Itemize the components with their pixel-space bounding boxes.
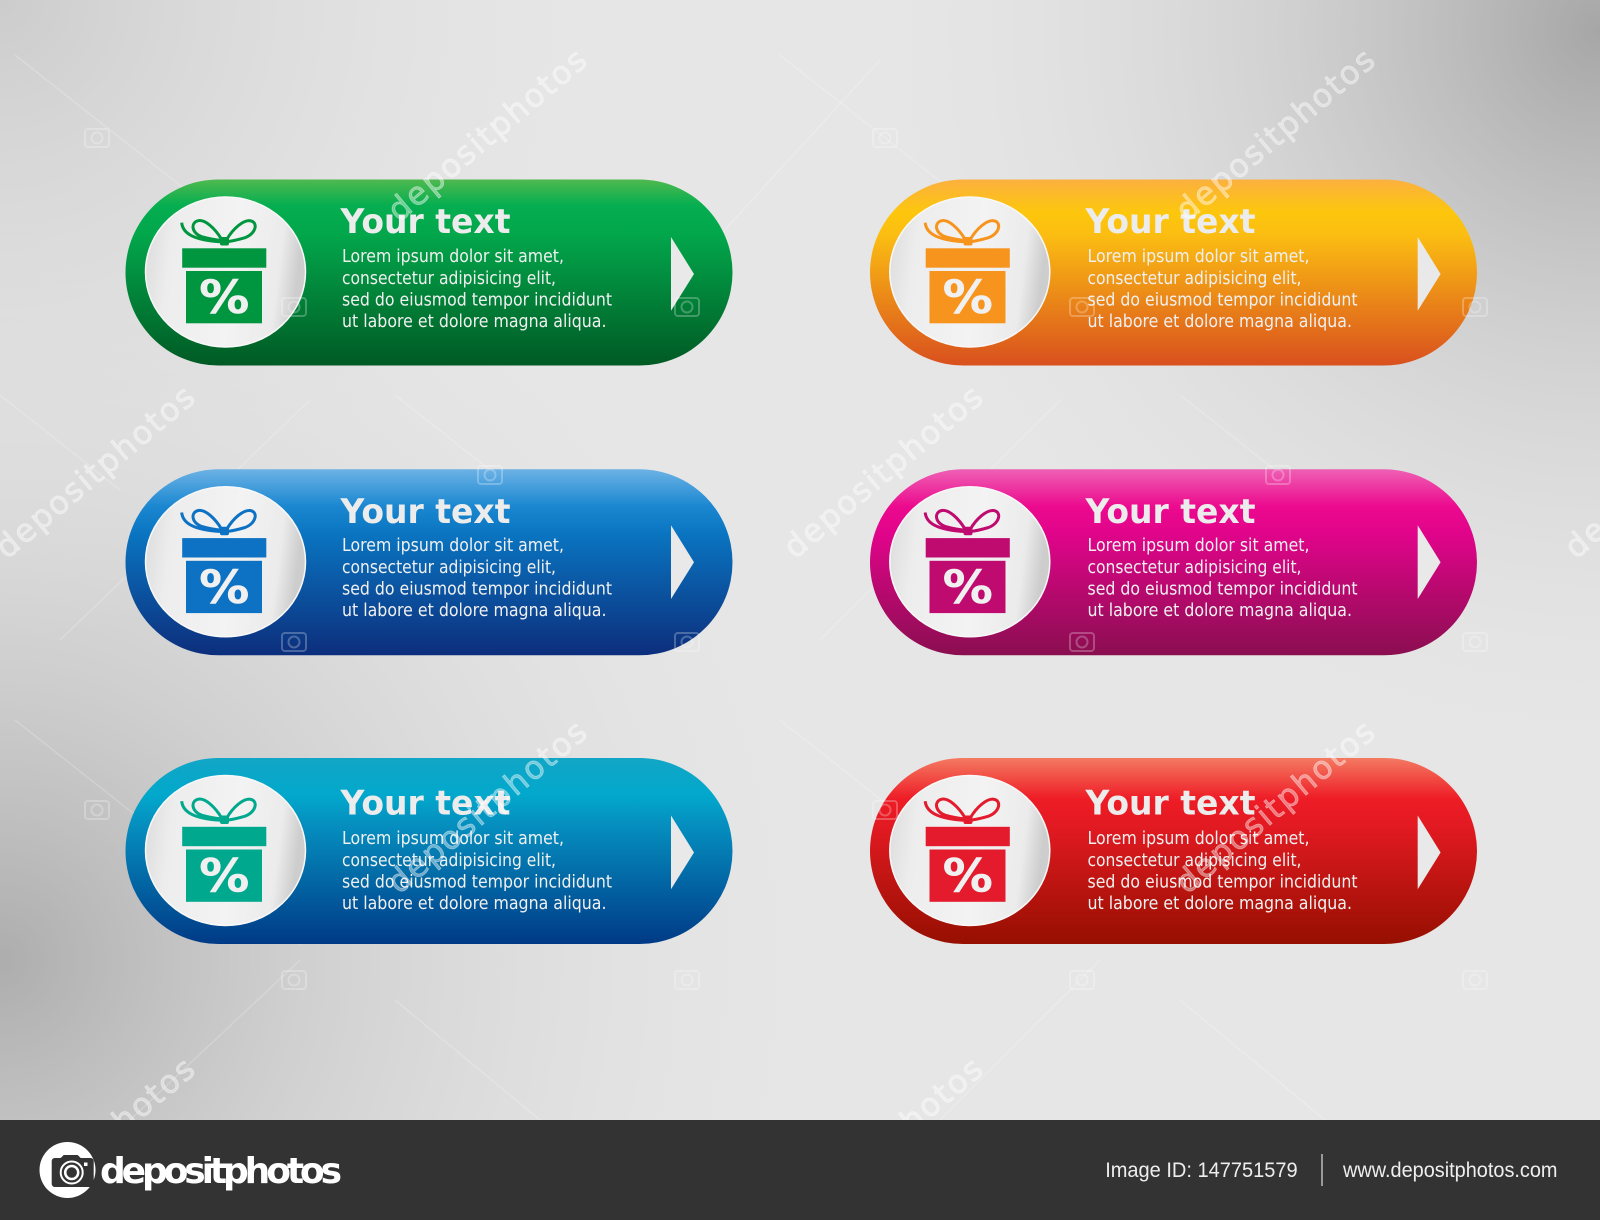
pill bbox=[126, 469, 732, 655]
arrow bbox=[671, 237, 694, 311]
pill bbox=[870, 469, 1477, 655]
watermark text: depositphotos bbox=[380, 713, 594, 901]
body text bbox=[342, 829, 612, 914]
body text: ut labore et dolore magna aliqua. bbox=[1088, 894, 1352, 914]
body text: Lorem ipsum dolor sit amet, bbox=[1088, 536, 1310, 556]
panel: orange banner bbox=[870, 180, 1477, 366]
pill bbox=[870, 180, 1477, 366]
image id: Image ID: 147751579 bbox=[1105, 1159, 1298, 1182]
title: Your text bbox=[1085, 784, 1256, 824]
icon: gift with percent bbox=[182, 221, 266, 324]
icon disc bbox=[890, 776, 1050, 926]
icon: gift with percent: % bbox=[199, 850, 249, 902]
panel: red banner bbox=[870, 758, 1477, 944]
pill bbox=[870, 758, 1477, 944]
body text: Lorem ipsum dolor sit amet, bbox=[1088, 247, 1310, 267]
icon disc bbox=[146, 197, 306, 347]
body text: Lorem ipsum dolor sit amet, bbox=[1088, 829, 1310, 849]
body text bbox=[342, 247, 612, 332]
body text bbox=[1088, 247, 1358, 332]
icon: gift with percent bbox=[925, 799, 1010, 902]
icon disc bbox=[890, 487, 1050, 637]
arrow bbox=[1418, 816, 1441, 889]
pill bbox=[126, 758, 732, 944]
body text: consectetur adipisicing elit, bbox=[1088, 558, 1302, 578]
title: Your text bbox=[340, 492, 510, 532]
icon: gift with percent: % bbox=[943, 561, 993, 614]
body text: ut labore et dolore magna aliqua. bbox=[1088, 312, 1352, 332]
body text bbox=[1088, 536, 1358, 621]
title: Your text bbox=[1085, 202, 1256, 242]
arrow bbox=[1418, 237, 1441, 311]
title: Your text bbox=[340, 784, 510, 824]
body text: consectetur adipisicing elit, bbox=[342, 269, 556, 289]
watermark text: depositphotos bbox=[1168, 41, 1382, 229]
body text bbox=[342, 536, 612, 621]
watermark text: depositphotos bbox=[1168, 713, 1382, 901]
icon disc bbox=[146, 487, 306, 637]
body text: sed do eiusmod tempor incididunt bbox=[1088, 291, 1358, 311]
arrow bbox=[671, 816, 694, 889]
icon disc bbox=[146, 776, 306, 926]
watermark text: depositphotos bbox=[776, 378, 990, 566]
body text: Lorem ipsum dolor sit amet, bbox=[342, 829, 564, 849]
arrow bbox=[671, 525, 694, 599]
icon: camera logo bbox=[40, 1142, 96, 1198]
icon: gift with percent: % bbox=[199, 271, 249, 324]
icon: gift with percent: % bbox=[199, 561, 249, 614]
logo wordmark: depositphotos bbox=[100, 1151, 342, 1192]
footer bar bbox=[0, 1120, 1600, 1220]
body text: sed do eiusmod tempor incididunt bbox=[1088, 579, 1358, 599]
icon: gift with percent bbox=[182, 510, 266, 614]
icon: gift with percent: % bbox=[943, 850, 993, 902]
title: Your text bbox=[1085, 492, 1256, 532]
icon: gift with percent bbox=[182, 799, 266, 902]
icon disc bbox=[890, 197, 1050, 347]
title: Your text bbox=[340, 202, 510, 242]
icon: gift with percent: % bbox=[943, 271, 993, 324]
arrow bbox=[1418, 525, 1441, 599]
body text: consectetur adipisicing elit, bbox=[342, 558, 556, 578]
body text: ut labore et dolore magna aliqua. bbox=[342, 894, 606, 914]
icon: gift with percent bbox=[925, 510, 1010, 614]
body text: sed do eiusmod tempor incididunt bbox=[342, 291, 612, 311]
watermark text: depositphotos bbox=[380, 41, 594, 229]
body text: ut labore et dolore magna aliqua. bbox=[342, 312, 606, 332]
body text: sed do eiusmod tempor incididunt bbox=[342, 579, 612, 599]
panel: teal-blue banner bbox=[126, 758, 732, 944]
website: www.depositphotos.com bbox=[1342, 1159, 1558, 1182]
body text: sed do eiusmod tempor incididunt bbox=[1088, 873, 1358, 893]
body text: ut labore et dolore magna aliqua. bbox=[342, 601, 606, 621]
pill bbox=[126, 180, 732, 366]
body text: Lorem ipsum dolor sit amet, bbox=[342, 536, 564, 556]
body text: consectetur adipisicing elit, bbox=[1088, 851, 1302, 871]
body text bbox=[1088, 829, 1358, 914]
body text: consectetur adipisicing elit, bbox=[1088, 269, 1302, 289]
body text: ut labore et dolore magna aliqua. bbox=[1088, 601, 1352, 621]
panel: green banner bbox=[126, 180, 732, 366]
panel: blue banner bbox=[126, 469, 732, 655]
panel: magenta banner bbox=[870, 469, 1477, 655]
body text: Lorem ipsum dolor sit amet, bbox=[342, 247, 564, 267]
icon: gift with percent bbox=[925, 221, 1010, 324]
watermark camera icons bbox=[85, 129, 1487, 989]
body text: consectetur adipisicing elit, bbox=[342, 851, 556, 871]
body text: sed do eiusmod tempor incididunt bbox=[342, 873, 612, 893]
